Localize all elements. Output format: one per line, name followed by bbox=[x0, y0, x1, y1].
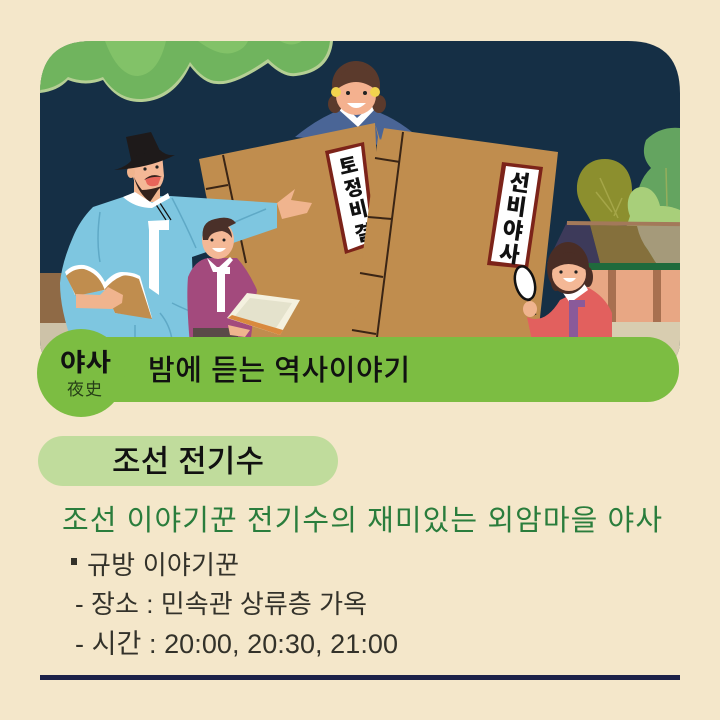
illustration panel bbox=[40, 41, 680, 371]
scholar in blue robe bbox=[60, 132, 312, 345]
magnifier bbox=[514, 265, 536, 316]
label: 토정비결 bbox=[325, 142, 370, 254]
goreum bbox=[148, 220, 169, 295]
details list bbox=[71, 550, 398, 659]
label: 토정비결: 결 bbox=[352, 220, 376, 247]
circle badge bbox=[37, 329, 125, 417]
subtitle pill bbox=[38, 436, 338, 486]
boy's open book bbox=[227, 293, 300, 335]
bottom rule bbox=[40, 675, 680, 680]
badge title: 야사 bbox=[60, 349, 111, 377]
label: 선비야사: 야 bbox=[501, 217, 525, 244]
cloud bbox=[40, 41, 333, 102]
beard bbox=[134, 177, 162, 202]
label: 토정비결: 비 bbox=[347, 197, 370, 223]
seated boy bbox=[187, 218, 300, 348]
hanok wall and fence bbox=[547, 221, 680, 370]
label: 토정비결: 토 bbox=[337, 154, 360, 180]
pill title: 조선 전기수 bbox=[112, 444, 264, 479]
badge hanja: 夜史 bbox=[67, 375, 102, 400]
large books bbox=[199, 123, 558, 345]
label: 선비야사 bbox=[487, 162, 543, 269]
label: 선비야사: 사 bbox=[498, 240, 521, 268]
open book bbox=[65, 265, 152, 319]
banner heading: 밤에 듣는 역사이야기 bbox=[148, 354, 410, 387]
head bbox=[134, 180, 160, 202]
collar bbox=[123, 192, 170, 208]
infographic bbox=[37, 41, 680, 680]
ground left bbox=[40, 273, 68, 352]
label: 선비야사: 선 bbox=[508, 169, 531, 197]
hand pointing bbox=[277, 189, 312, 219]
item: place: - 장소 : 민속관 상류층 가옥 bbox=[75, 589, 367, 619]
girl with magnifier bbox=[511, 242, 612, 345]
right book bbox=[351, 123, 558, 345]
background trees bbox=[577, 128, 680, 262]
girl behind books bbox=[295, 61, 412, 145]
item: time: - 시간 : 20:00, 20:30, 21:00 bbox=[75, 629, 398, 659]
left book bbox=[199, 123, 385, 345]
label: 선비야사: 비 bbox=[504, 193, 528, 220]
hat bbox=[114, 132, 175, 170]
label: 토정비결: 정 bbox=[342, 175, 365, 202]
bullet bbox=[71, 558, 77, 565]
item: 규방 이야기꾼: 규방 이야기꾼 bbox=[87, 550, 239, 580]
green description: 조선 이야기꾼 전기수의 재미있는 외암마을 야사 bbox=[62, 505, 662, 537]
green banner bbox=[37, 329, 679, 417]
